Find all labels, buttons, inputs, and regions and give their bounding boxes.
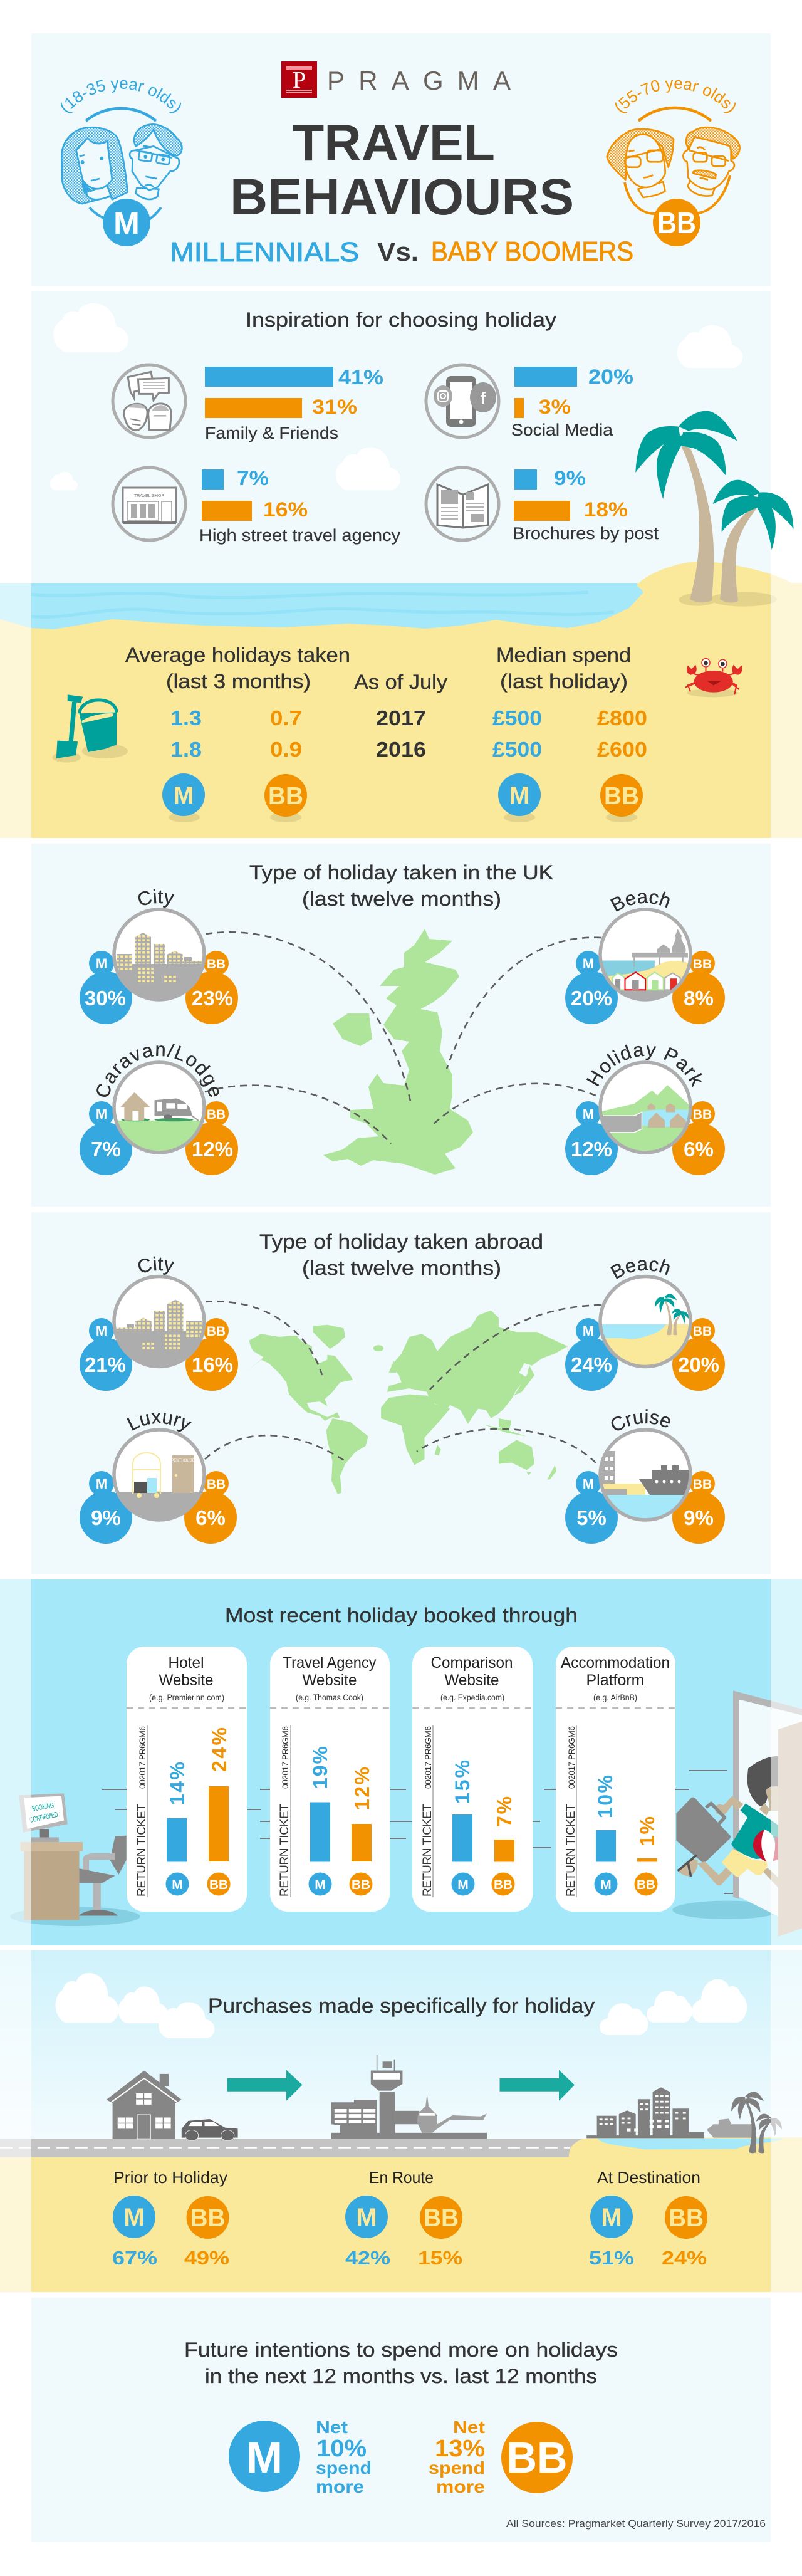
subtitle: BABY BOOMERS xyxy=(431,236,633,267)
ticket: hotel website: RETURN TICKET xyxy=(135,1804,148,1897)
ticket: comparison website: M xyxy=(457,1878,469,1892)
heading: (last twelve months) xyxy=(302,887,501,910)
stat: abroad cruise xyxy=(565,1409,725,1544)
stat: baby boomers future intention: BB xyxy=(506,2433,568,2482)
stat: abroad city: City xyxy=(138,1256,174,1275)
icon: baby boomers couple: (55-70 year olds) xyxy=(615,80,736,113)
stat: UK holiday park: Holiday Park xyxy=(586,1044,702,1087)
icon: travel shop xyxy=(113,468,185,540)
badges: median spend: M xyxy=(509,782,529,809)
illustration: destination skyline xyxy=(586,2087,782,2153)
heading: Type of holiday taken in the UK xyxy=(249,861,553,884)
ticket: comparison website: (e.g. Expedia.com) xyxy=(440,1693,504,1702)
heading: Future intentions to spend more on holidays xyxy=(184,2338,618,2361)
stat: at destination: At Destination xyxy=(597,2168,700,2187)
illustration: runner leaving through door xyxy=(672,1690,802,1937)
subtitle: MILLENNIALS xyxy=(170,237,359,268)
stat: UK caravan/lodge: 12% xyxy=(192,1138,233,1161)
bar chart: social media xyxy=(511,365,633,439)
table: holidays and spend values: 2016 xyxy=(376,738,426,761)
icon: bucket and spade xyxy=(52,694,128,763)
bar chart: social media: 20% xyxy=(588,365,633,388)
bar chart: brochures by post: 18% xyxy=(584,498,628,521)
stat: UK beach xyxy=(565,891,725,1024)
ticket: hotel website: M xyxy=(172,1878,183,1892)
ticket: travel agency website xyxy=(270,1647,390,1912)
stat: abroad luxury: 6% xyxy=(195,1506,226,1529)
stat: UK city: M xyxy=(96,956,107,971)
heading xyxy=(259,1230,543,1279)
road xyxy=(0,2139,593,2157)
stat: baby boomers future intention xyxy=(429,2417,573,2496)
stat: UK caravan/lodge xyxy=(80,1043,238,1175)
ticket: comparison website: 002017 PR6GM6 xyxy=(423,1726,433,1789)
stat: UK holiday park: BB xyxy=(693,1107,712,1122)
title: TRAVEL xyxy=(293,115,495,172)
stat: abroad city: 16% xyxy=(192,1353,233,1376)
stat: UK city: 23% xyxy=(192,987,233,1010)
icon: social media: f xyxy=(481,389,486,407)
bar chart: high street travel agency xyxy=(199,467,401,545)
stat: at destination xyxy=(589,2168,707,2269)
stat: millennials future intention xyxy=(229,2417,372,2496)
logo: Pragma xyxy=(281,61,511,98)
bar chart: family and friends xyxy=(205,366,383,442)
icon: millennials couple xyxy=(60,80,183,246)
ticket: comparison website: 7% xyxy=(493,1796,516,1827)
ticket: travel agency website: 12% xyxy=(351,1767,373,1810)
heading xyxy=(184,2338,618,2387)
icon: family and friends xyxy=(113,365,185,437)
bar chart: brochures by post: Brochures by post xyxy=(513,524,659,543)
ticket: accommodation platform: 1% xyxy=(636,1816,659,1846)
bar chart: family and friends: 31% xyxy=(312,395,357,418)
panel: purchases made specifically for holiday xyxy=(0,1950,802,2292)
panel: beach holidays and spend xyxy=(0,411,802,838)
illustration: airport xyxy=(331,2055,487,2139)
ticket: hotel website: Website xyxy=(159,1672,213,1689)
logo: Pragma: PRAGMA xyxy=(327,66,511,95)
logo: Pragma: P xyxy=(293,67,306,93)
stat: abroad beach: 20% xyxy=(678,1353,719,1376)
illustration: palm island xyxy=(631,411,802,608)
ticket: accommodation platform: 10% xyxy=(594,1775,617,1818)
stat: abroad cruise: M xyxy=(583,1476,594,1492)
ticket: hotel website: 24% xyxy=(208,1727,231,1772)
stat: prior to holiday: M xyxy=(123,2204,145,2231)
stat: abroad beach: 24% xyxy=(571,1353,612,1376)
table: holidays and spend values: 2017 xyxy=(376,706,426,730)
map: UK xyxy=(323,929,473,1175)
dashed connectors xyxy=(205,1301,601,1463)
stat: UK beach: 8% xyxy=(684,987,714,1010)
icon: crab xyxy=(685,659,742,697)
ticket: comparison website: 15% xyxy=(451,1760,474,1804)
stat: abroad luxury xyxy=(80,1413,237,1544)
ticket: accommodation platform: M xyxy=(600,1878,612,1892)
heading xyxy=(249,861,553,910)
bar chart: family and friends: 41% xyxy=(338,366,383,389)
ticket: hotel website: Hotel xyxy=(168,1654,204,1672)
stat: abroad beach: BB xyxy=(693,1324,712,1339)
badges: holidays taken: BB xyxy=(268,783,303,810)
ticket: hotel website xyxy=(127,1647,247,1912)
heading: median spend xyxy=(496,644,631,693)
badge: M: M xyxy=(113,206,140,241)
ticket: travel agency website: M xyxy=(315,1878,326,1892)
arrow xyxy=(500,2070,575,2101)
stat: en route xyxy=(345,2168,462,2269)
bar chart: high street travel agency: 7% xyxy=(237,467,269,490)
map: world xyxy=(246,1311,568,1494)
stat: at destination: M xyxy=(601,2204,622,2231)
table: holidays and spend values: 0.7 xyxy=(270,706,302,730)
table: holidays and spend values: 0.9 xyxy=(270,738,302,761)
icon: social media xyxy=(426,365,499,437)
bar chart: high street travel agency: High street travel agency xyxy=(199,526,401,545)
ticket: accommodation platform: BB xyxy=(637,1878,655,1892)
panel: most recent holiday booked through xyxy=(0,1579,802,1945)
stat: abroad luxury: BB xyxy=(207,1477,226,1492)
text: booking confirmed: BOOKING xyxy=(31,1801,55,1813)
stat: en route: M xyxy=(356,2204,377,2231)
stat: UK beach: Beach xyxy=(610,891,670,912)
stat: UK beach: 20% xyxy=(571,987,612,1010)
table: holidays and spend values: £600 xyxy=(597,738,647,761)
stat: UK city xyxy=(80,889,238,1024)
heading: average holidays taken: (last 3 months) xyxy=(166,670,311,693)
stat: UK beach: BB xyxy=(693,957,712,971)
ticket: comparison website: Comparison xyxy=(431,1654,513,1672)
ticket: accommodation platform: RETURN TICKET xyxy=(565,1804,578,1897)
stat: UK city: 30% xyxy=(85,987,126,1010)
ticket: accommodation platform: 002017 PR6GM6 xyxy=(566,1726,576,1789)
stat: abroad city: BB xyxy=(207,1324,226,1339)
ticket: hotel website: (e.g. Premierinn.com) xyxy=(149,1693,224,1702)
table: holidays and spend values: 1.8 xyxy=(170,738,202,761)
stat: prior to holiday: 67% xyxy=(112,2247,157,2269)
stat: prior to holiday: BB xyxy=(190,2204,226,2232)
stat: millennials future intention: M xyxy=(246,2433,283,2482)
stat: millennials future intention: Net xyxy=(316,2417,348,2437)
table: holidays and spend values: £500 xyxy=(492,706,542,730)
table: holidays and spend values: £800 xyxy=(597,706,647,730)
title: BEHAVIOURS xyxy=(230,169,574,226)
stat: UK holiday park: 6% xyxy=(684,1138,714,1161)
stat: abroad city: 21% xyxy=(85,1353,126,1376)
ticket: travel agency website: 19% xyxy=(309,1746,331,1789)
bar chart: brochures by post: 9% xyxy=(554,467,586,490)
heading: median spend: (last holiday) xyxy=(500,670,628,693)
clouds xyxy=(55,1973,747,2038)
heading: Most recent holiday booked through xyxy=(225,1604,578,1626)
arrow xyxy=(227,2070,302,2101)
table: holidays and spend values: 1.3 xyxy=(170,706,202,730)
table: holidays and spend values: £500 xyxy=(492,738,542,761)
stat: at destination: 24% xyxy=(662,2247,707,2269)
bar chart: brochures by post xyxy=(513,467,659,543)
heading: Type of holiday taken abroad xyxy=(259,1230,543,1253)
ticket: accommodation platform: (e.g. AirBnB) xyxy=(593,1693,637,1702)
ticket: hotel website: 14% xyxy=(166,1762,189,1805)
ticket: travel agency website: 002017 PR6GM6 xyxy=(280,1726,290,1789)
stat: en route: En Route xyxy=(369,2168,434,2187)
badges: median spend xyxy=(498,773,643,822)
badge: BB: BB xyxy=(657,207,696,240)
stat: abroad beach: Beach xyxy=(610,1259,670,1279)
stat: en route: BB xyxy=(424,2204,459,2232)
heading: (last twelve months) xyxy=(302,1257,501,1279)
title xyxy=(230,115,574,226)
stat: abroad cruise: BB xyxy=(693,1477,712,1492)
stat: UK holiday park: M xyxy=(583,1106,594,1122)
ticket: travel agency website: RETURN TICKET xyxy=(278,1804,291,1897)
stat: baby boomers future intention: more xyxy=(436,2477,485,2496)
ticket: hotel website: BB xyxy=(209,1878,228,1892)
heading: Inspiration for choosing holiday xyxy=(246,308,556,331)
icon: travel shop: TRAVEL SHOP xyxy=(134,494,164,498)
heading: median spend: Median spend xyxy=(496,644,631,666)
icon: millennials couple: (18-35 year olds) xyxy=(60,80,182,113)
ticket: travel agency website: (e.g. Thomas Cook) xyxy=(296,1693,363,1702)
ticket: comparison website xyxy=(412,1647,533,1912)
stat: abroad cruise: 9% xyxy=(684,1506,714,1529)
icon: brochure xyxy=(426,468,499,540)
stat: abroad beach: M xyxy=(583,1323,594,1339)
heading: average holidays taken: Average holidays taken xyxy=(125,644,350,666)
table: holidays and spend values xyxy=(170,706,647,761)
stat: abroad luxury: M xyxy=(96,1476,107,1492)
illustration: booking desk xyxy=(10,1793,140,1926)
stat: baby boomers future intention: spend xyxy=(429,2458,485,2478)
stat: abroad luxury: 9% xyxy=(91,1506,121,1529)
illustration: house and car xyxy=(107,2071,238,2141)
stat: at destination: 51% xyxy=(589,2247,634,2269)
text: booking confirmed xyxy=(29,1801,59,1825)
stat: UK holiday park xyxy=(565,1044,725,1175)
stat: UK city: City xyxy=(138,889,174,908)
stat: abroad city: M xyxy=(96,1323,107,1339)
bar chart: social media: Social Media xyxy=(511,421,613,439)
panel: header xyxy=(31,33,771,286)
dashed connectors xyxy=(205,932,601,1144)
ticket: accommodation platform: Platform xyxy=(586,1672,644,1689)
bar chart: social media: 3% xyxy=(539,395,571,418)
text: booking confirmed: CONFIRMED xyxy=(29,1810,59,1825)
heading: Purchases made specifically for holiday xyxy=(208,1994,595,2017)
stat: prior to holiday: 49% xyxy=(184,2247,229,2269)
stat: en route: 42% xyxy=(345,2247,390,2269)
stat: abroad cruise: Cruise xyxy=(612,1409,670,1430)
panel: type of holiday taken abroad xyxy=(31,1212,771,1574)
bar chart: family and friends: Family & Friends xyxy=(205,424,338,442)
panel: type of holiday taken in the UK xyxy=(31,844,771,1207)
source note: All Sources: Pragmarket Quarterly Survey 2017/2016 xyxy=(506,2518,766,2530)
stat: UK holiday park: 12% xyxy=(571,1138,612,1161)
stat: en route: 15% xyxy=(418,2247,462,2269)
ticket: travel agency website: Travel Agency xyxy=(283,1654,377,1672)
stat: UK caravan/lodge: BB xyxy=(207,1107,226,1122)
badges: holidays taken: M xyxy=(174,782,194,809)
subtitle: Vs. xyxy=(377,237,419,266)
stat: millennials future intention: 10% xyxy=(316,2436,367,2462)
stat: at destination: BB xyxy=(669,2204,704,2232)
subtitle xyxy=(170,236,633,268)
panel: future intentions xyxy=(31,2298,771,2542)
stat: millennials future intention: spend xyxy=(316,2458,372,2478)
stat: UK caravan/lodge: 7% xyxy=(91,1138,121,1161)
stat: baby boomers future intention: Net xyxy=(453,2417,485,2437)
badge: M xyxy=(103,199,150,246)
stat: abroad beach xyxy=(565,1259,725,1391)
stat: prior to holiday: Prior to Holiday xyxy=(113,2168,227,2187)
stat: baby boomers future intention: 13% xyxy=(435,2436,485,2462)
stat: abroad city xyxy=(80,1256,238,1391)
stat: abroad cruise: 5% xyxy=(576,1506,607,1529)
heading: as of july: As of July xyxy=(354,671,447,693)
ticket: travel agency website: BB xyxy=(352,1878,370,1892)
bar chart: high street travel agency: 16% xyxy=(263,498,308,521)
heading: average holidays taken xyxy=(125,644,350,693)
stat: millennials future intention: more xyxy=(316,2477,364,2496)
speed lines xyxy=(102,1771,761,1893)
stat: abroad luxury: PENTHOUSE xyxy=(171,1459,195,1463)
stat: UK beach: M xyxy=(583,956,594,971)
clouds xyxy=(50,303,742,490)
stat: abroad luxury: Luxury xyxy=(127,1413,192,1432)
stat: UK caravan/lodge: Caravan/Lodge xyxy=(96,1043,219,1097)
badges: holidays taken xyxy=(162,773,307,822)
ticket: accommodation platform: Accommodation xyxy=(561,1654,670,1672)
sand xyxy=(0,2137,802,2292)
stat: UK city: BB xyxy=(207,957,226,971)
stat: UK caravan/lodge: M xyxy=(96,1106,107,1122)
panel: inspiration for choosing holiday xyxy=(31,291,771,585)
badges: median spend: BB xyxy=(604,783,639,810)
icon: baby boomers couple xyxy=(606,80,741,246)
sea xyxy=(0,583,643,629)
ticket: travel agency website: Website xyxy=(302,1672,357,1689)
ticket: accommodation platform xyxy=(556,1647,675,1912)
badge: BB xyxy=(653,199,700,246)
ticket: comparison website: BB xyxy=(494,1878,513,1892)
stat: prior to holiday xyxy=(112,2168,229,2269)
ticket: comparison website: RETURN TICKET xyxy=(421,1804,434,1897)
ticket: comparison website: Website xyxy=(445,1672,499,1689)
heading: in the next 12 months vs. last 12 months xyxy=(205,2365,597,2387)
ticket: hotel website: 002017 PR6GM6 xyxy=(137,1726,147,1789)
